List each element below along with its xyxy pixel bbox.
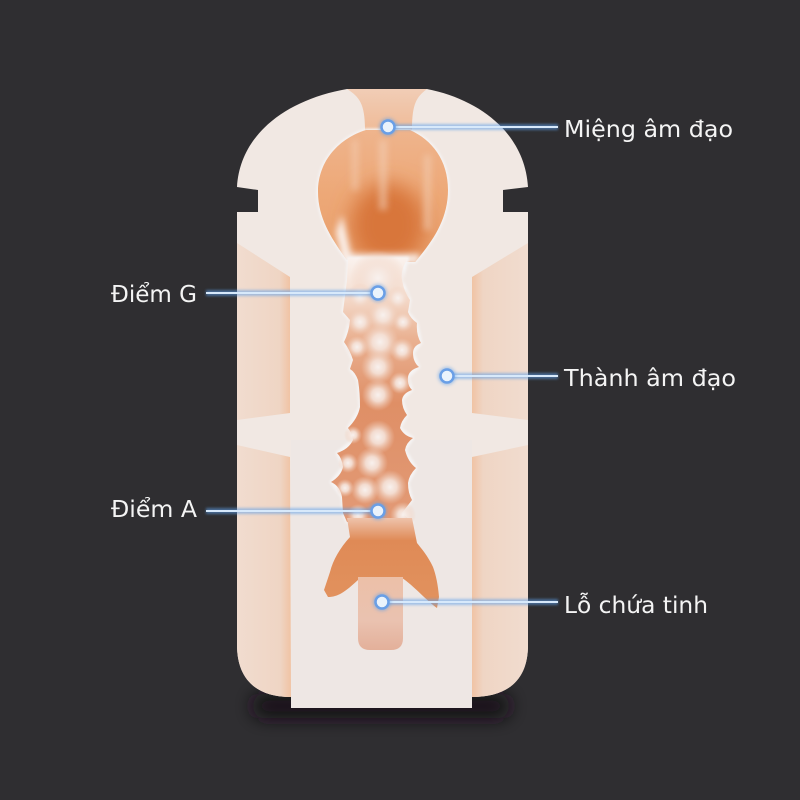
callout: Miệng âm đạo: Miệng âm đạo [564, 117, 733, 143]
upper chamber halo [318, 130, 448, 262]
callout: Thành âm đạo: Thành âm đạo [563, 366, 736, 392]
callout: Điểm A [111, 497, 387, 523]
panel: right upper wall section [472, 243, 528, 420]
callout: Điểm G: Điểm G [111, 282, 197, 308]
mouth neck [347, 89, 427, 130]
product body [237, 89, 528, 708]
callout: Thành âm đạo [438, 366, 736, 392]
forked chamber [324, 518, 439, 608]
ribbed canal [331, 258, 421, 522]
ribbed canal halo [331, 258, 421, 522]
upper chamber [318, 130, 448, 262]
callout: Lỗ chứa tinh: Lỗ chứa tinh [564, 591, 708, 619]
callout: Điểm A: Điểm A [111, 497, 197, 523]
inner canal [310, 89, 455, 650]
base shadow [252, 694, 510, 718]
panel: outer shell [237, 89, 528, 697]
canal bumps [336, 250, 416, 528]
panel: left upper wall section [237, 243, 290, 420]
end pocket [358, 577, 403, 650]
panel: left lower wall section [237, 445, 291, 697]
callout: Lỗ chứa tinh [373, 591, 708, 619]
panel: right lower wall section [472, 445, 528, 697]
callout: Điểm G [111, 282, 387, 308]
callout: Miệng âm đạo [379, 117, 733, 143]
panel: centre column [291, 440, 472, 708]
